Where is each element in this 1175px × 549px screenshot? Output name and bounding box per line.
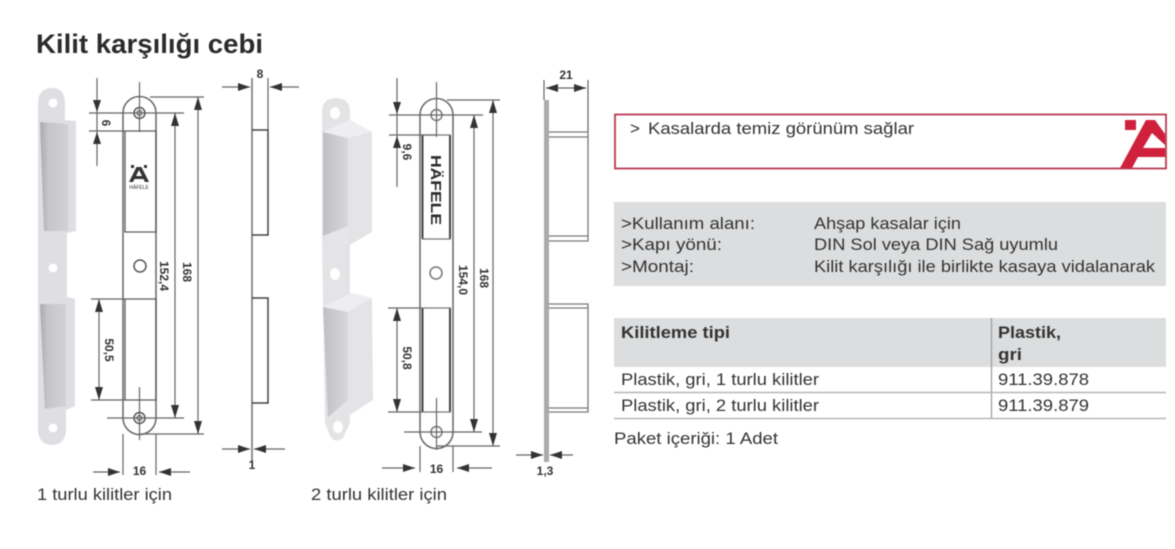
dimension: 50,5: 50,5 — [102, 338, 116, 362]
package note: Paket içeriği: 1 Adet — [614, 429, 778, 448]
table row 1: 911.39.878 — [998, 370, 1089, 389]
table: product codes — [614, 318, 1166, 418]
dimension: 168 second: 168 — [477, 268, 491, 288]
spec: usage: Ahşap kasalar için — [814, 214, 961, 233]
icon: small Häfele logo — [129, 165, 149, 191]
table row 1: Plastik, gri, 1 turlu kilitler — [621, 370, 819, 389]
dimension: 9,6 — [389, 78, 483, 187]
dimension: 168 second — [437, 100, 500, 446]
panel: feature callout — [615, 114, 1166, 168]
table header — [621, 323, 1061, 364]
drawing: 1-turn strike plate front view — [123, 82, 156, 440]
table header: Plastik, — [998, 323, 1061, 342]
spec: usage — [621, 214, 961, 233]
text: feature: Kasalarda temiz görünüm sağlar — [648, 119, 914, 138]
drawing: 1-turn side view: 8 — [257, 67, 264, 81]
dimension: 168 — [140, 97, 204, 434]
logo text: HÄFELE: HÄFELE — [427, 155, 444, 225]
table row 2 — [621, 396, 1089, 415]
dimension: 50,5 — [91, 299, 125, 400]
dimension: 16 — [93, 434, 190, 478]
spec: door direction — [621, 235, 1058, 254]
drawing: 2-turn side view: 1,3 — [537, 464, 554, 478]
photo: 1-turn strike pocket — [38, 88, 76, 445]
icon: Häfele red logo — [1120, 120, 1165, 168]
table header: gri — [998, 345, 1022, 364]
drawing: 1-turn side view — [222, 67, 299, 472]
dimension: 50,8 — [388, 308, 422, 412]
dimension: 152,4 — [107, 113, 184, 418]
drawing: 2-turn strike plate front view — [420, 82, 453, 450]
spec: door direction: >Kapı yönü: — [621, 235, 722, 254]
spec: mounting: Kilit karşılığı ile birlikte kasaya vidalanarak — [814, 257, 1156, 276]
title: Kilit karşılığı cebi — [36, 29, 263, 59]
spec: mounting — [621, 257, 1156, 276]
drawing: 2-turn side view — [516, 68, 588, 478]
dimension: 6 — [89, 78, 184, 166]
dimension: 50,8: 50,8 — [400, 346, 414, 370]
dimension: 154,0: 154,0 — [456, 265, 470, 295]
table row 2: 911.39.879 — [998, 396, 1089, 415]
photo: 2-turn strike pocket — [322, 98, 373, 441]
text: feature: > — [630, 119, 640, 138]
spec: door direction: DIN Sol veya DIN Sağ uyumlu — [814, 235, 1058, 254]
icon: small Häfele logo: HÄFELE — [129, 184, 149, 191]
dimension: 9,6: 9,6 — [400, 144, 414, 161]
table row 2: Plastik, gri, 2 turlu kilitler — [621, 396, 819, 415]
table row 1 — [621, 370, 1089, 389]
dimension: 154,0 — [404, 115, 482, 432]
dimension: 16: 16 — [133, 464, 146, 478]
caption: 2 turlu: 2 turlu kilitler için — [311, 485, 447, 504]
panel: specification — [614, 202, 1166, 286]
drawing: 1-turn side view: 1 — [249, 458, 256, 472]
spec: usage: >Kullanım alanı: — [621, 214, 755, 233]
dimension: 16 second: 16 — [430, 462, 443, 476]
caption: 1 turlu: 1 turlu kilitler için — [37, 485, 172, 504]
spec: mounting: >Montaj: — [621, 257, 694, 276]
dimension: 16 second — [382, 446, 492, 476]
dimension: 152,4: 152,4 — [157, 261, 171, 291]
drawing: 2-turn side view: 21 — [559, 68, 573, 82]
table header: Kilitleme tipi — [621, 323, 730, 342]
dimension: 168: 168 — [180, 262, 194, 282]
dimension: 6: 6 — [99, 120, 113, 127]
